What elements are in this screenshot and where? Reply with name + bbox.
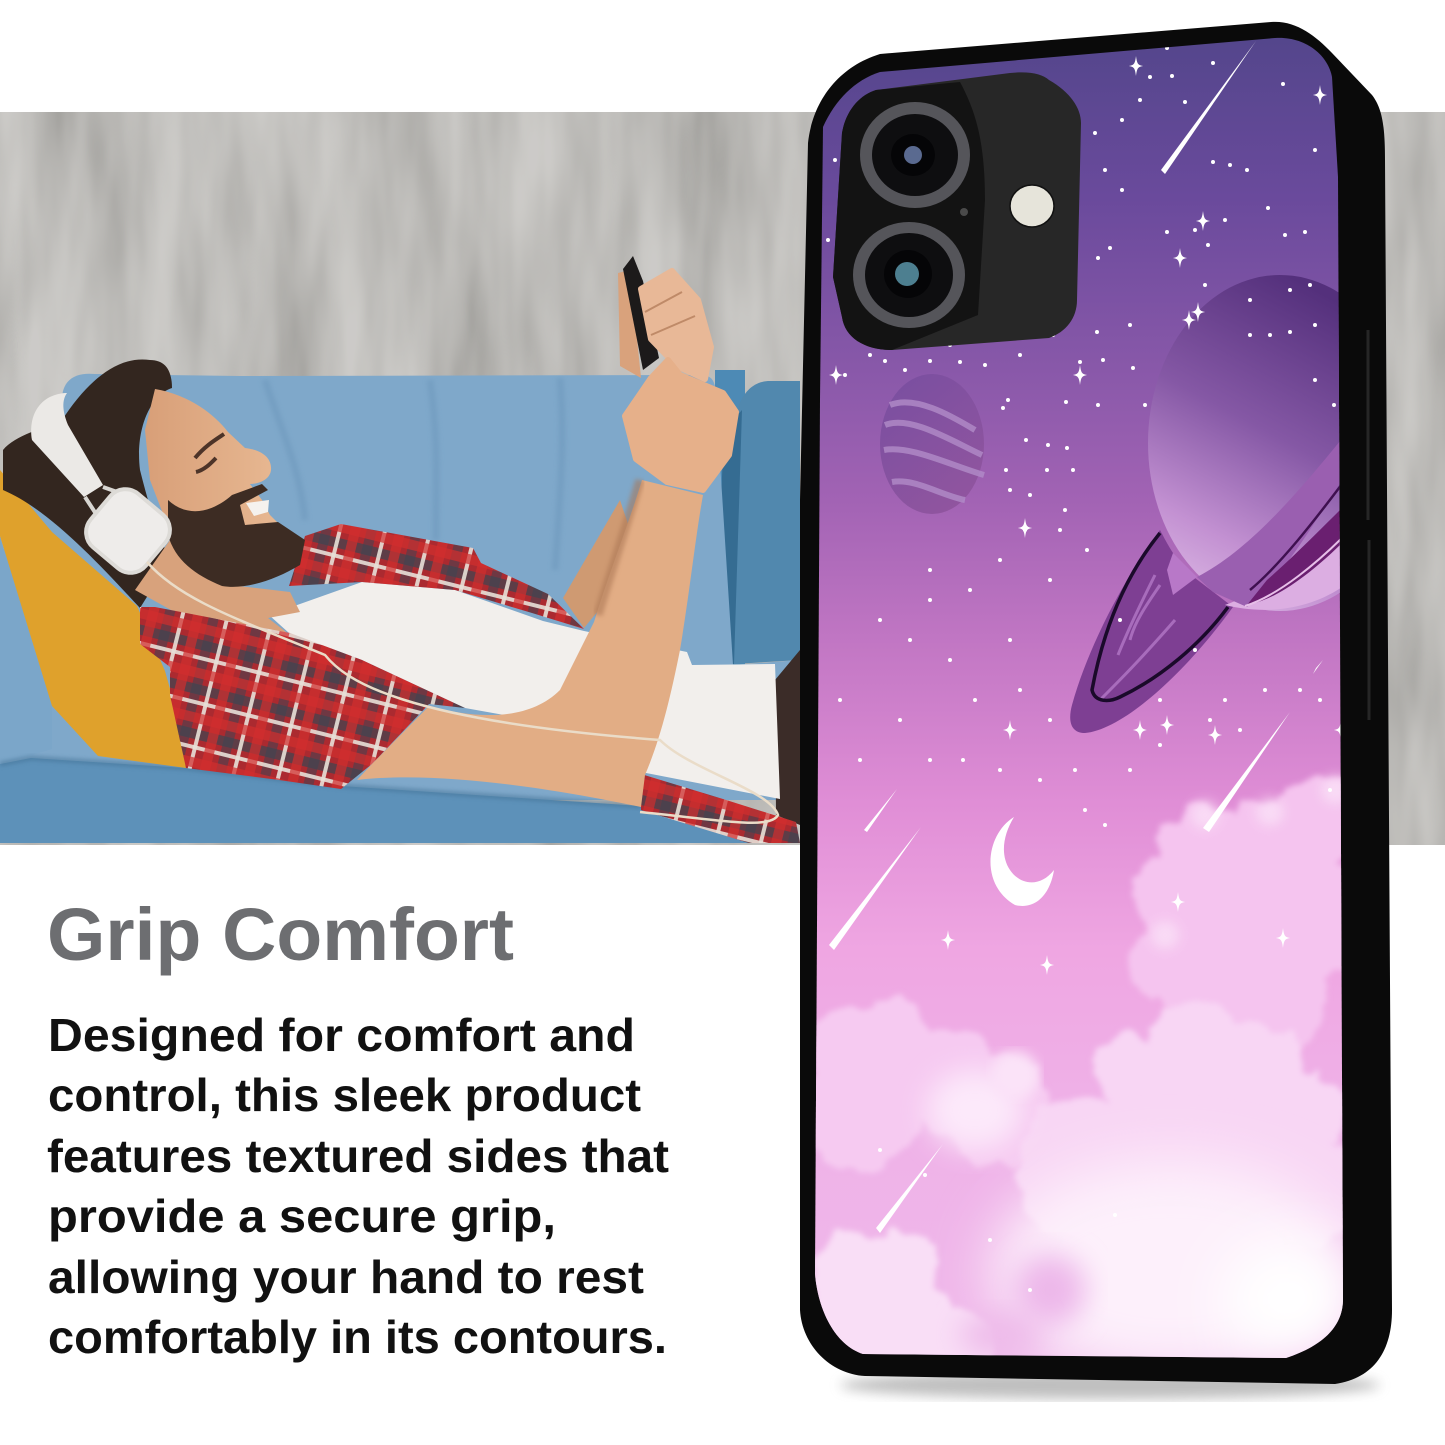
heading: Grip Comfort — [47, 893, 514, 976]
ringed planet — [1070, 275, 1340, 733]
small striped planet — [880, 374, 984, 514]
neck — [135, 540, 300, 635]
man lying on sofa — [3, 256, 800, 843]
earphone wire — [147, 562, 778, 823]
t-shirt — [269, 582, 780, 799]
side button grooves — [1368, 330, 1369, 720]
headphones — [31, 393, 178, 581]
body text: features textured sides that — [47, 1130, 669, 1182]
arm — [357, 480, 703, 807]
clouds — [800, 775, 1370, 1380]
right upper cloud — [1126, 772, 1342, 1046]
background photo: lifestyle scene — [0, 112, 1445, 845]
lower right cloud — [1015, 1000, 1360, 1250]
eye and brow — [195, 434, 224, 472]
smile — [246, 500, 269, 516]
star dots — [828, 48, 1334, 1290]
camera module — [833, 72, 1081, 350]
body text: control, this sleek product — [48, 1069, 641, 1121]
printed back panel — [815, 38, 1343, 1358]
crescent moon — [990, 817, 1054, 906]
microphone — [960, 208, 968, 216]
face — [145, 389, 285, 580]
lower left cloud — [800, 1000, 1055, 1170]
phone case — [800, 22, 1412, 1384]
lower lens — [853, 222, 965, 328]
upper lens — [860, 102, 970, 208]
bottom left cloud — [815, 1225, 996, 1356]
trousers — [775, 650, 800, 825]
hand with phone — [618, 256, 736, 490]
plaid collar — [289, 524, 584, 629]
beard — [168, 484, 305, 587]
front ring — [1197, 435, 1345, 607]
planet body — [1148, 275, 1340, 611]
phone case shadow — [840, 1371, 1380, 1399]
black case body — [800, 22, 1392, 1384]
body text: Designed for comfort and — [48, 1009, 635, 1061]
body text: comfortably in its contours. — [48, 1311, 667, 1363]
hair — [3, 359, 172, 608]
flash — [1010, 185, 1054, 227]
lower shirt tail — [641, 774, 800, 843]
body text — [47, 1009, 669, 1363]
rear forearm — [563, 500, 640, 628]
pillow — [0, 470, 186, 768]
wall — [0, 112, 1445, 845]
sparkle stars — [829, 56, 1348, 975]
body text: allowing your hand to rest — [48, 1251, 644, 1303]
shooting stars — [829, 41, 1323, 1233]
body text: provide a secure grip, — [48, 1190, 556, 1242]
plaid overshirt — [140, 607, 465, 789]
back ring — [1070, 530, 1233, 733]
sofa — [0, 370, 800, 843]
